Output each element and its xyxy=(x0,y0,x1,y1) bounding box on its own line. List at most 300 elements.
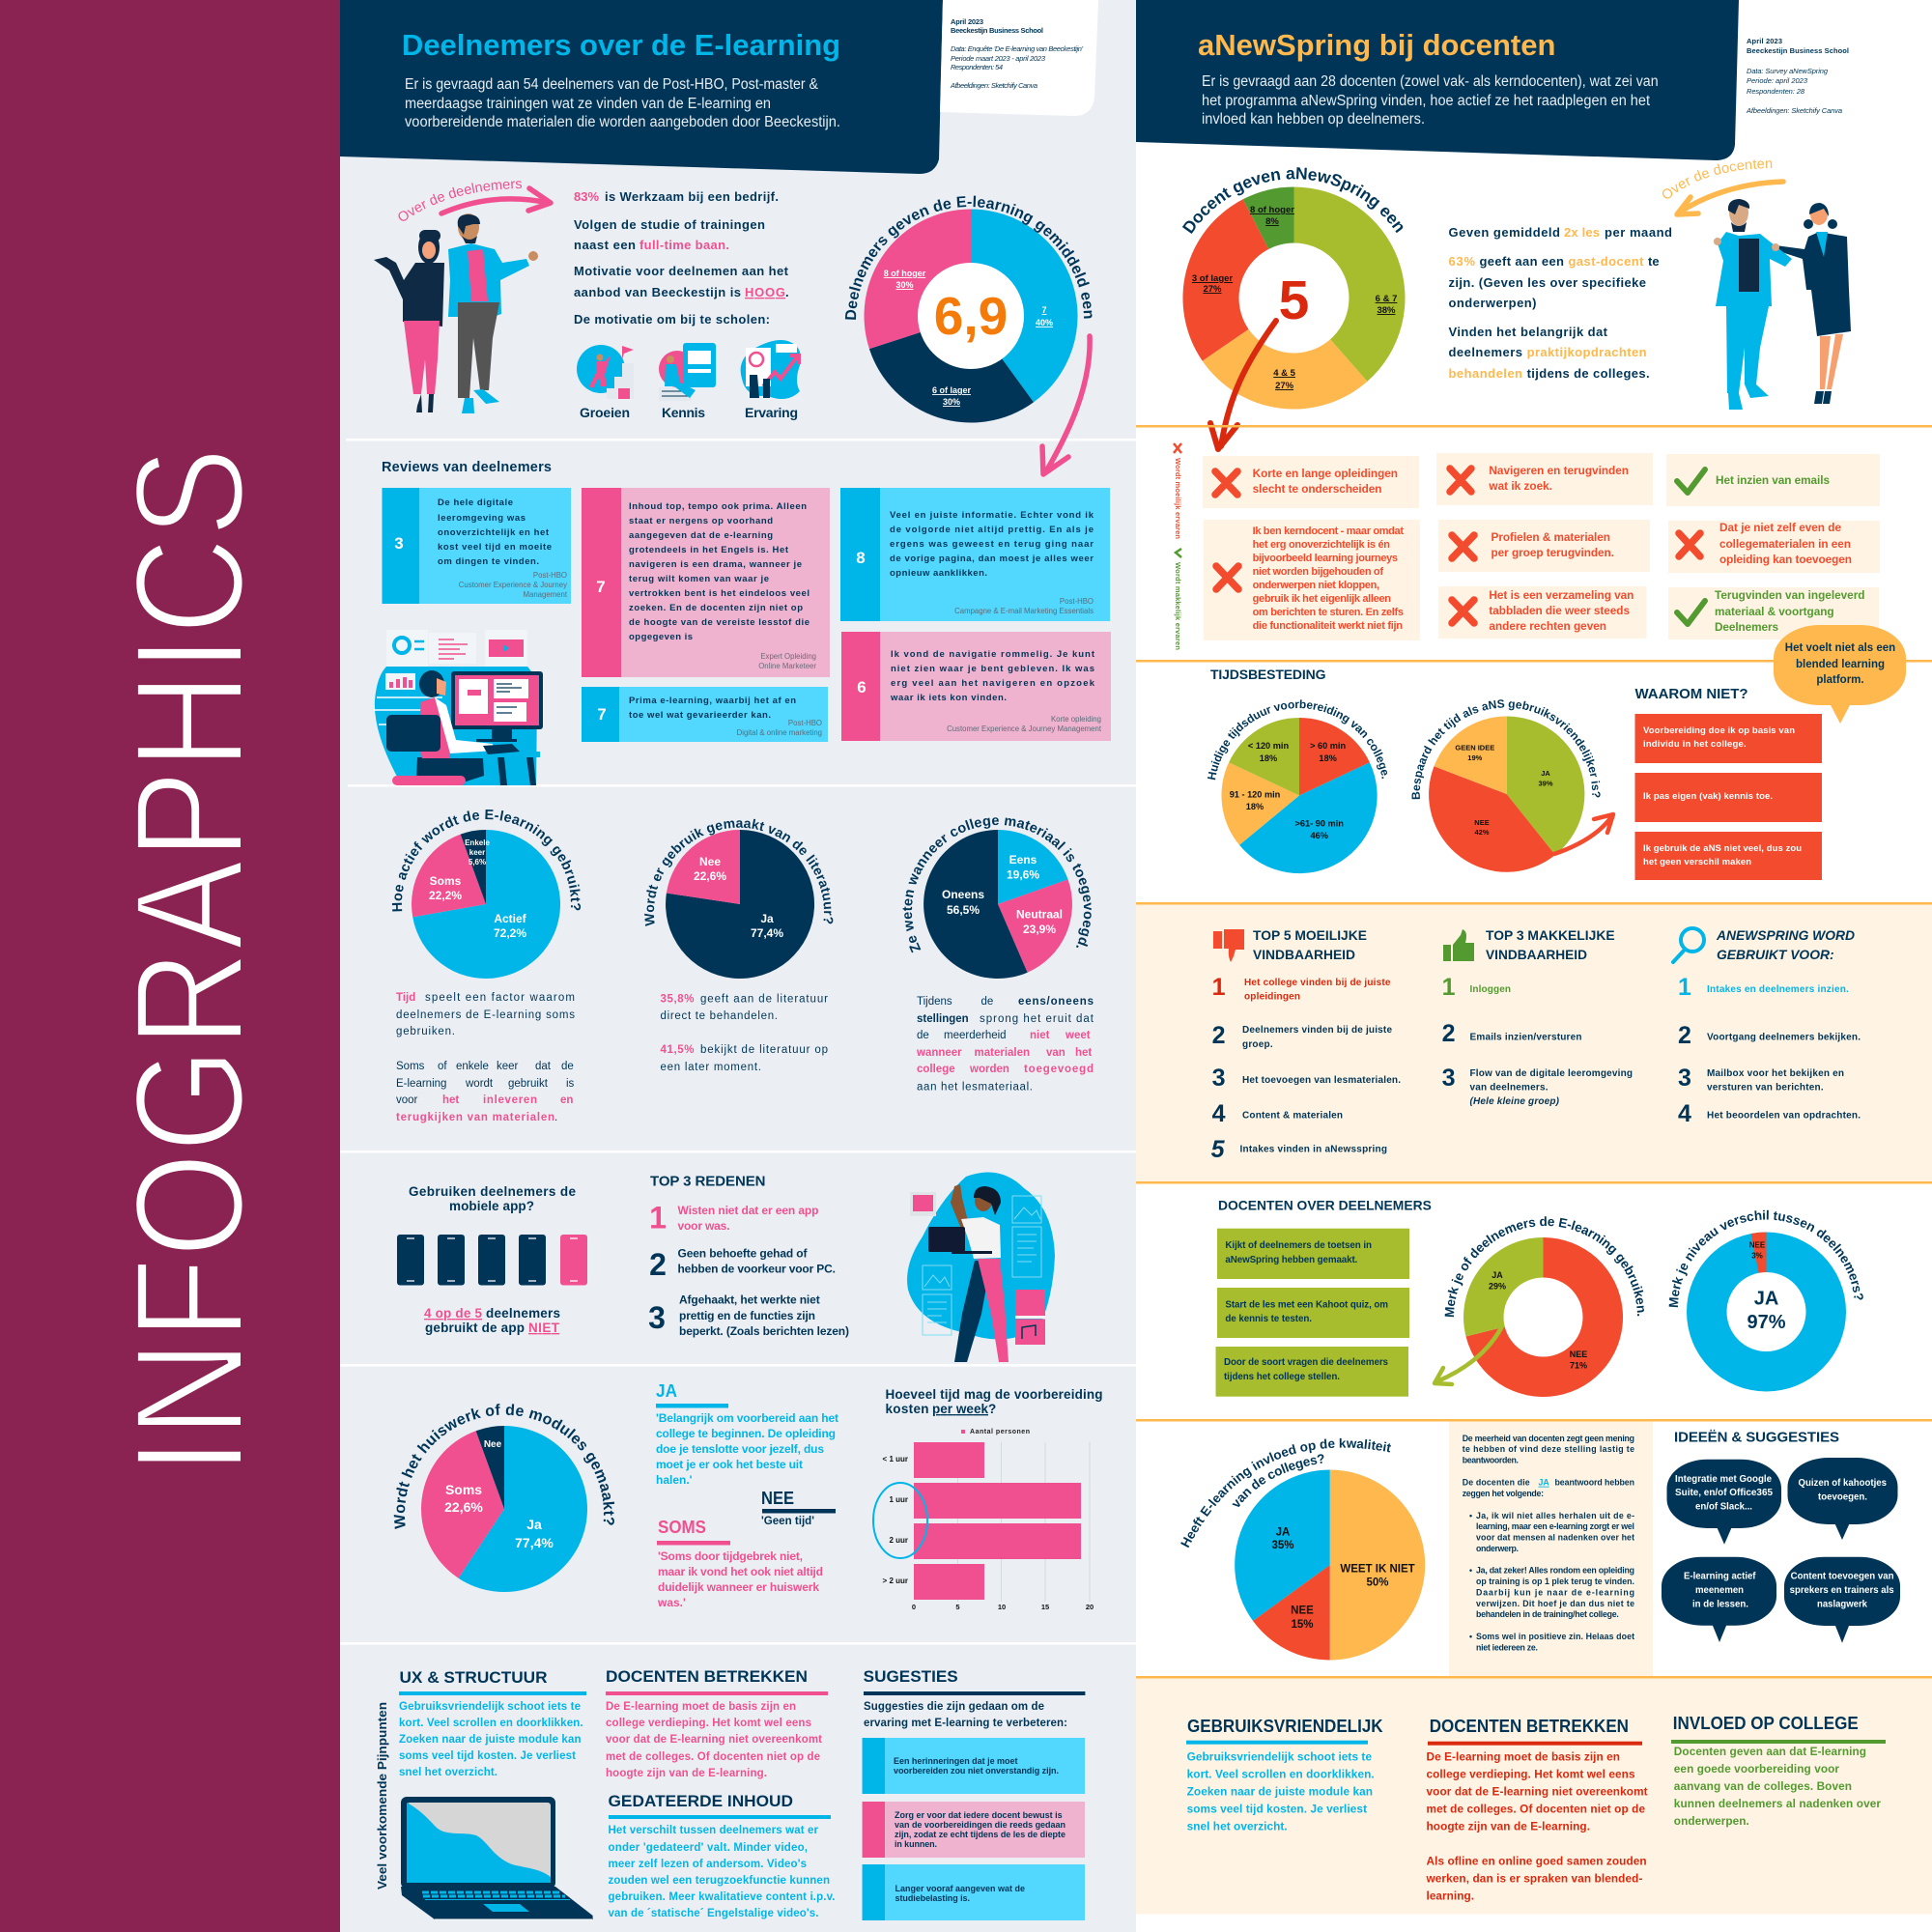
review card 7 short: Post-HBO xyxy=(788,719,822,727)
chart: pie materials: Neutraal xyxy=(1016,908,1063,922)
column: docenten betrekken: De E-learning moet de basis zijn en xyxy=(1426,1750,1620,1764)
difficult items: Navigeren en terugvinden xyxy=(1489,464,1629,477)
intro text: meerdaagse trainingen wat ze vinden van de E-learning en xyxy=(405,96,771,112)
difficult items: Ik ben kerndocent - maar omdat xyxy=(1253,526,1404,537)
list: top 3 easy: 1 xyxy=(1442,974,1456,1001)
review card 6: niet zien waar je bent gebleven. Ik was xyxy=(891,664,1094,674)
chart: pie influence xyxy=(1180,1437,1426,1660)
chart: pie materials xyxy=(902,817,1092,979)
column: suggesties: Suggesties die zijn gedaan om de xyxy=(864,1701,1044,1713)
text block: pie literature notes: direct te behandelen. xyxy=(661,1010,778,1022)
panel: top 3 reasons: hebben de voorkeur voor PC. xyxy=(678,1263,836,1276)
column: gebruiksvriendelijk: soms veel tijd kosten. Je verliest xyxy=(1187,1803,1367,1816)
chart: donut average score: 30% xyxy=(895,280,914,290)
text block: soms: maar ik vond het ook niet altijd xyxy=(658,1565,823,1578)
illustration: two lecturers xyxy=(1714,199,1851,410)
text block: influence explanation: verwijzen. Dit hoef je dan dus niet te xyxy=(1476,1599,1634,1608)
chart: pie activity: Actief xyxy=(494,912,527,925)
chart: pie current time: < 120 min xyxy=(1248,741,1289,751)
panel: lecturers about participants: aNewSpring hebben gemaakt. xyxy=(1225,1255,1358,1265)
text block: lecturers summary: Geven gemiddeld xyxy=(1449,225,1560,240)
text block: pie literature notes: 41,5% xyxy=(661,1044,694,1056)
icons: phones xyxy=(397,1235,587,1285)
icons: crosses xyxy=(1215,469,1700,623)
panel: left background xyxy=(340,0,1136,1932)
review card 6: Ik vond de navigatie rommelig. Je kunt xyxy=(891,649,1095,660)
heading: top 5: VINDBAARHEID xyxy=(1253,947,1355,962)
illustration: laptop xyxy=(401,1797,593,1919)
suggestion box 2: Zorg er voor dat iedere docent bewust is xyxy=(895,1810,1063,1820)
review card 7 long: aangegeven dat de e-learning xyxy=(629,530,773,541)
column: gedateerde inhoud: GEDATEERDE INHOUD xyxy=(609,1792,793,1810)
chart: donut average score: 7 xyxy=(1041,305,1047,315)
review card 6: Korte opleiding xyxy=(1051,715,1101,724)
difficult items: slecht te onderscheiden xyxy=(1253,482,1381,496)
text block: about participants: naast een xyxy=(574,238,636,252)
column: invloed op college: Docenten geven aan dat E-learning xyxy=(1674,1745,1866,1758)
curved title: Merk je niveau verschil tussen deelnemers? xyxy=(1669,1209,1863,1308)
review card 6: erg veel aan het navigeren en opzoek xyxy=(891,678,1095,689)
chart: pie influence: 15% xyxy=(1291,1619,1314,1631)
panel: source card left: Beeckestijn Business School xyxy=(951,26,1043,35)
panel: lecturers about participants: de kennis te testen. xyxy=(1225,1314,1312,1324)
review card 7 long xyxy=(582,488,830,677)
bubble: integratie: Suite, en/of Office365 xyxy=(1675,1487,1773,1498)
easy items: Het inzien van emails xyxy=(1716,473,1830,487)
list: top 3 easy: Inloggen xyxy=(1470,984,1511,995)
review card 3: De hele digitale xyxy=(438,497,513,508)
panel: source card left: Afbeeldingen: Sketchify Canva xyxy=(950,81,1037,90)
column: docenten betrekken: met de colleges. Of docenten niet op de xyxy=(606,1751,820,1763)
difficult items: collegematerialen in een xyxy=(1719,537,1851,551)
list: top 5 hard: Het toevoegen van lesmaterialen. xyxy=(1242,1075,1401,1086)
chart: donut level difference: 3% xyxy=(1751,1252,1763,1261)
review card 7 short: toe wel wat gevarieerder kan. xyxy=(629,710,771,721)
text block: nee: 'Geen tijd' xyxy=(761,1514,814,1527)
curved title: Wordt het huiswerk of de modules gemaakt? xyxy=(394,1404,614,1529)
text block: lecturers summary: geeft aan een xyxy=(1480,254,1564,269)
text block: pie materials notes: eens/oneens xyxy=(1018,996,1094,1008)
intro text: Er is gevraagd aan 28 docenten (zowel vak- als kerndocenten), wat zei van xyxy=(1202,73,1659,90)
column: gedateerde inhoud: van de ´statische´ Engelstalige video's. xyxy=(609,1908,819,1919)
column: docenten betrekken: De E-learning moet de basis zijn en xyxy=(606,1701,796,1713)
review card 7 long: terug wilt komen van waar je xyxy=(629,574,769,584)
text block: ja: moet je er ook het beste uit xyxy=(656,1458,803,1471)
column: ux en structuur xyxy=(399,1668,586,1778)
review card 3: Customer Experience & Journey xyxy=(459,581,567,589)
text block: influence explanation: beantwoorden. xyxy=(1463,1456,1519,1465)
column: gedateerde inhoud: onder 'gedateerd' valt. Minder video, xyxy=(609,1842,808,1854)
text block: lecturers summary: deelnemers xyxy=(1449,345,1522,359)
text block: about participants: De motivatie om bij te scholen: xyxy=(574,312,770,327)
text block: lecturers summary: gast-docent xyxy=(1569,254,1644,269)
list: top 3 easy: Emails inzien/versturen xyxy=(1470,1033,1582,1043)
list: top 5 hard: 5 xyxy=(1211,1136,1226,1163)
text block: pie materials notes: college xyxy=(917,1064,955,1075)
chart: donut notice usage: 29% xyxy=(1489,1282,1506,1292)
panel: mobile app xyxy=(397,1184,587,1335)
chart: donut lecturers score: 38% xyxy=(1377,305,1396,316)
intro text: invloed kan hebben op deelnemers. xyxy=(1202,111,1425,128)
bubble: quizen: toevoegen. xyxy=(1818,1492,1867,1503)
text block: pie materials notes: niet xyxy=(1030,1030,1050,1041)
difficult items: niet worden bijgehouden of xyxy=(1253,566,1383,578)
heading: INFOGRAPHICS: INFOGRAPHICS xyxy=(102,447,275,1475)
text block: pie literature notes: een later moment. xyxy=(661,1062,761,1073)
chart: donut notice usage: JA xyxy=(1492,1270,1503,1280)
illustration: two participants xyxy=(374,213,538,413)
icon: groeien xyxy=(577,345,634,420)
chart: pie saves time: NEE xyxy=(1474,818,1490,827)
label: Kennis: Kennis xyxy=(662,405,705,420)
panel: reviews xyxy=(382,460,1111,742)
column: docenten betrekken: hoogte zijn van de E-learning. xyxy=(1426,1820,1590,1833)
text block: pie activity notes: . xyxy=(554,1112,557,1123)
text block: lecturers summary: te xyxy=(1648,254,1660,269)
text block: pie literature notes: bekijkt de literatuur op xyxy=(700,1044,828,1056)
text block: pie activity notes: is xyxy=(566,1078,575,1090)
chart: pie influence: 35% xyxy=(1271,1540,1294,1551)
text block: lecturers summary: 63% xyxy=(1449,254,1475,269)
chart: pie literature: Nee xyxy=(699,855,721,868)
panel: mobile app: deelnemers xyxy=(486,1306,560,1321)
review card 3: kost veel tijd en moeite xyxy=(438,542,552,553)
panel: top lists xyxy=(1211,927,1861,1163)
text block: pie literature notes xyxy=(661,993,828,1073)
text block: pie materials notes: het xyxy=(1075,1047,1092,1059)
intro text: het programma aNewSpring vinden, hoe actief ze het raadplegen en het xyxy=(1202,93,1651,109)
column: docenten betrekken: werken, dan is er spraken van blended- xyxy=(1426,1872,1642,1886)
text block: about participants: is Werkzaam bij een bedrijf. xyxy=(601,189,779,204)
legend: rotated: Wordt moeilijk ervaren xyxy=(1174,458,1182,539)
suggestion box 3 xyxy=(863,1864,1085,1920)
curved title: Huidige tijdsduur voorbereiding van college. xyxy=(1208,699,1387,781)
heading: top 5 xyxy=(1253,927,1367,962)
legend: rotated xyxy=(1174,443,1182,650)
text block: influence explanation: te hebben of vind deze stelling lastig te xyxy=(1463,1444,1634,1454)
text block: influence explanation: niet iedereen ze. xyxy=(1476,1643,1538,1653)
panel: why not: het geen verschil maken xyxy=(1643,857,1751,867)
column: docenten betrekken xyxy=(1426,1717,1648,1903)
dividers left xyxy=(340,439,1136,1644)
text block: pie activity notes: wordt xyxy=(465,1078,494,1090)
review card 7 long: staat er nergens op voorhand xyxy=(629,516,773,526)
text block: pie activity notes: dat xyxy=(535,1061,552,1072)
callout: over de docenten: Over de docenten xyxy=(1662,159,1772,199)
intro text: voorbereidende materialen die worden aangeboden door Beeckestijn. xyxy=(405,114,840,130)
panel: left header xyxy=(340,0,943,174)
column: docenten betrekken: learning. xyxy=(1426,1889,1474,1903)
review card 7 long: Expert Opleiding xyxy=(760,652,816,661)
difficult items: wat ik zoek. xyxy=(1488,479,1552,493)
text block: pie activity notes: gebruiken. xyxy=(396,1026,455,1037)
chart: donut lecturers score xyxy=(1182,167,1405,410)
chart: donut lecturers score: 6 & 7 xyxy=(1376,294,1397,304)
list: top 5 hard: 2 xyxy=(1212,1022,1226,1049)
text block: influence explanation: • xyxy=(1469,1511,1472,1520)
list: top 5 hard xyxy=(1211,974,1401,1163)
difficult items: per groep terugvinden. xyxy=(1492,546,1614,559)
arrow: red to list xyxy=(1210,321,1276,449)
text block: pie materials notes: meerderheid xyxy=(944,1030,1007,1041)
text block: influence explanation: De meerheid van docenten zegt geen mening xyxy=(1463,1434,1634,1443)
list: top 3 easy: (Hele kleine groep) xyxy=(1470,1096,1560,1107)
panel: pain points xyxy=(375,1667,1085,1920)
text block: influence explanation: Ja, dat zeker! Alles rondom een opleiding xyxy=(1476,1566,1634,1576)
text block: pie materials notes: weet xyxy=(1065,1030,1091,1041)
column: docenten betrekken xyxy=(606,1667,828,1779)
review card 7 short: Prima e-learning, waarbij het af en xyxy=(629,696,796,706)
orange dividers and cream blocks xyxy=(1136,425,1932,1915)
text block: pie materials notes: sprong het eruit dat xyxy=(980,1013,1094,1025)
text block: pie activity notes: deelnemers de E-learning soms xyxy=(396,1009,575,1021)
chart: pie saves time: JA xyxy=(1541,769,1550,778)
text block: pie activity notes: voor xyxy=(396,1094,418,1106)
chart: pie saves time: 42% xyxy=(1474,828,1490,837)
text block: soms: SOMS xyxy=(658,1518,706,1537)
panel: experiences xyxy=(1203,453,1880,640)
review card 8: de volgorde niet altijd prettig. En als je xyxy=(890,525,1094,535)
list: top 5 hard: 4 xyxy=(1212,1100,1226,1127)
review card 7 long: Online Marketeer xyxy=(758,662,816,670)
text block: influence explanation: learning, maar een e-learning zorgt er wel xyxy=(1476,1521,1634,1531)
text block: ja: JA xyxy=(656,1381,677,1401)
column: suggesties xyxy=(863,1667,1085,1920)
curved title: Docent geven aNewSpring een xyxy=(1182,167,1403,234)
panel: lecturers about participants: Door de soort vragen die deelnemers xyxy=(1224,1357,1389,1368)
chart: pie homework: 77,4% xyxy=(515,1535,554,1550)
bubble: content: sprekers en trainers als xyxy=(1790,1584,1894,1596)
easy items: Deelnemers xyxy=(1715,620,1778,634)
text block: pie materials notes: de xyxy=(981,996,993,1008)
suggestion box 3: studiebelasting is. xyxy=(895,1893,970,1903)
bubble: integratie: en/of Slack... xyxy=(1695,1501,1752,1513)
chart: pie materials: 56,5% xyxy=(947,903,980,917)
review card 6: 6 xyxy=(857,678,867,696)
review card 7 long: zoeken. En de docenten zijn niet op xyxy=(629,603,803,613)
panel: why not xyxy=(1634,686,1822,880)
text block: pie materials notes: stellingen xyxy=(917,1013,969,1025)
chart: donut level difference: NEE xyxy=(1749,1241,1766,1250)
chart: donut average score: 30% xyxy=(943,397,960,407)
icon: ervaring xyxy=(741,340,801,420)
list: top 3 easy: 3 xyxy=(1442,1065,1456,1092)
chart: pie homework: Ja xyxy=(526,1517,542,1532)
heading: anewspring: GEBRUIKT VOOR: xyxy=(1717,947,1834,962)
chart: donut average score: 40% xyxy=(1036,318,1053,327)
text block: nee: NEE xyxy=(761,1489,794,1508)
chart: donut lecturers score: 4 & 5 xyxy=(1273,368,1296,379)
title: Deelnemers over de E-learning xyxy=(402,28,840,62)
text block: pie activity notes: de xyxy=(561,1061,574,1072)
list: usage: 2 xyxy=(1678,1022,1691,1049)
curved title: Bespaard het tijd als aNS gebruiksvriendelijker is? xyxy=(1412,699,1601,800)
review card 7 long: de hoogte van de vereiste lesstof die xyxy=(629,617,810,628)
chart: pie homework xyxy=(394,1404,614,1592)
bubble: actief: in de lessen. xyxy=(1692,1599,1748,1610)
intro text: Er is gevraagd aan 54 deelnemers van de Post-HBO, Post-master & xyxy=(405,76,819,93)
chart: bar preparation time: per week xyxy=(932,1402,988,1416)
list: usage: Voortgang deelnemers bekijken. xyxy=(1707,1033,1861,1043)
review card 6 xyxy=(841,632,1111,741)
chart: pie literature: 77,4% xyxy=(751,926,783,940)
text block: lecturers summary: 2x les xyxy=(1564,225,1600,240)
illustration: woman with laptop xyxy=(907,1173,1055,1362)
text block: pie activity notes: Soms xyxy=(396,1061,425,1072)
heading: top 3 xyxy=(1486,927,1615,962)
text block: source right: Beeckestijn Business School xyxy=(1747,46,1849,55)
list: usage: 3 xyxy=(1678,1065,1691,1092)
text block: influence explanation: De docenten die xyxy=(1463,1478,1530,1488)
column: gebruiksvriendelijk: snel het overzicht. xyxy=(1187,1820,1288,1833)
chart: donut notice usage: 71% xyxy=(1570,1361,1587,1371)
suggestion box 1: Een herinneringen dat je moet xyxy=(894,1756,1018,1766)
review card 7 long: grotendeels in het Engels is. Het xyxy=(629,545,789,555)
suggestion box 1 xyxy=(863,1738,1085,1794)
review card 7 long: 7 xyxy=(596,578,606,596)
difficult items: Korte en lange opleidingen xyxy=(1253,467,1398,480)
text block: pie materials notes: de xyxy=(917,1030,929,1041)
chart: pie literature: 22,6% xyxy=(694,869,726,883)
panel: source card left: Periode maart 2023 - april 2023 xyxy=(951,54,1046,63)
text block: about participants: Motivatie voor deelnemen aan het xyxy=(574,264,789,278)
review card 8: opnieuw aanklikken. xyxy=(890,568,987,579)
panel: top 3 reasons: 2 xyxy=(649,1247,667,1282)
bubble: quizen xyxy=(1787,1458,1897,1540)
bubble: integratie xyxy=(1667,1460,1781,1545)
bubble: actief: E-learning actief xyxy=(1684,1571,1756,1582)
review card 3: leeromgeving was xyxy=(438,513,526,524)
list: top 5 hard: 1 xyxy=(1212,974,1226,1001)
text block: influence explanation: • xyxy=(1469,1566,1472,1576)
chart: pie saves time: GEEN IDEE xyxy=(1455,744,1494,753)
panel: top 3 reasons: Afgehaakt, het werkte niet xyxy=(679,1293,820,1307)
column: gedateerde inhoud xyxy=(609,1792,835,1919)
panel: ideas: IDEEËN & SUGGESTIES xyxy=(1674,1430,1839,1446)
chart: pie homework: Nee xyxy=(484,1439,502,1450)
text block: soms: 'Soms door tijdgebrek niet, xyxy=(658,1549,803,1563)
list: top 3 easy: Flow van de digitale leeromgeving xyxy=(1470,1068,1633,1079)
bubble: quizen: Quizen of kahootjes xyxy=(1799,1477,1887,1489)
text block: lecturers summary: zijn. (Geven les over specifieke xyxy=(1449,275,1646,290)
text block: about participants: Volgen de studie of trainingen xyxy=(574,217,765,232)
difficult items: die functionaliteit werkt niet fijn xyxy=(1253,620,1403,632)
list: top 3 easy: van deelnemers. xyxy=(1470,1083,1548,1094)
chart: pie saves time xyxy=(1412,699,1601,872)
text block: pie materials notes: Tijdens xyxy=(917,996,952,1008)
panel: top 3 reasons: beperkt. (Zoals berichten lezen) xyxy=(679,1324,849,1338)
text block: pie activity notes: Tijd xyxy=(396,992,415,1004)
text block: lecturers summary xyxy=(1449,225,1672,381)
column: invloed op college: onderwerpen. xyxy=(1674,1814,1749,1828)
review card 7 long: navigeren is een drama, wanneer je xyxy=(629,559,802,570)
panel: top 3 reasons: 1 xyxy=(649,1200,667,1235)
panel: top 3 reasons: Wisten niet dat er een app xyxy=(678,1204,819,1217)
chart: pie current time: >61- 90 min xyxy=(1295,819,1344,829)
review card 3: onoverzichtelijk en het xyxy=(438,527,550,538)
panel: lecturers about participants xyxy=(1215,1198,1432,1397)
panel: source card left: Respondenten: 54 xyxy=(951,63,1003,71)
chart: bar preparation time: 20 xyxy=(1086,1603,1094,1611)
review card 6: Customer Experience & Journey Management xyxy=(947,724,1102,733)
heading: top 5: TOP 5 MOEILIJKE xyxy=(1253,927,1367,943)
number: 6,9: 6,9 xyxy=(934,286,1008,346)
list: top 5 hard: Intakes vinden in aNewsspring xyxy=(1240,1145,1387,1155)
panel: why not: WAAROM NIET? xyxy=(1634,686,1748,702)
panel: mobile app: NIET xyxy=(528,1321,560,1335)
text block: pie activity notes: E-learning xyxy=(396,1078,446,1090)
suggestion box 3: Langer vooraf aangeven wat de xyxy=(895,1884,1025,1893)
column: suggesties: SUGESTIES xyxy=(864,1667,958,1686)
panel: top 3 reasons xyxy=(648,1173,849,1338)
chart: donut average score xyxy=(844,195,1092,423)
text block: influence explanation: Ja, ik wil niet alles herhalen uit de e- xyxy=(1476,1511,1634,1520)
chart: donut lecturers score: 3 of lager xyxy=(1192,273,1233,284)
chart: bar preparation time: ? xyxy=(988,1402,996,1416)
column: gedateerde inhoud: gebruiken. Meer kwalitatieve content i.p.v. xyxy=(609,1891,835,1903)
chart: donut level difference xyxy=(1669,1209,1863,1391)
review card 8: ergens was geweest en terug ging naar xyxy=(890,539,1094,550)
suggestion box 2: van de voorbereidingen die reeds gedaan xyxy=(895,1820,1065,1830)
column: ux en structuur: kort. Veel scrollen en doorklikken. xyxy=(399,1718,583,1729)
panel: maroon side band xyxy=(0,0,340,1932)
column: ux en structuur: UX & STRUCTUUR xyxy=(400,1668,547,1687)
text block: lecturers summary: behandelen xyxy=(1449,366,1522,381)
review card 3: Post-HBO xyxy=(533,571,567,580)
panel: top 3 reasons: voor was. xyxy=(678,1219,730,1233)
text block: source right: April 2023 xyxy=(1747,37,1782,45)
chart: bar preparation time xyxy=(873,1387,1103,1611)
chart: donut level difference: 97% xyxy=(1747,1312,1786,1333)
suggestion box 1: voorbereiden zou niet onverstandig zijn. xyxy=(894,1766,1059,1776)
heading: top 3: VINDBAARHEID xyxy=(1486,947,1587,962)
difficult items: Het is een verzameling van xyxy=(1489,588,1634,602)
column: docenten betrekken: hoogte zijn van de E-learning. xyxy=(606,1768,767,1779)
curved chart title: Deelnemers geven de E-learning gemiddeld een xyxy=(844,195,1092,320)
chart: bar preparation time: 15 xyxy=(1041,1603,1049,1611)
text block: influence explanation: behandelen in de training/het college. xyxy=(1476,1609,1619,1619)
text block: soms: duidelijk wanneer er huiswerk xyxy=(658,1580,819,1594)
text block: influence explanation: • xyxy=(1469,1632,1472,1641)
intro text xyxy=(1202,73,1659,128)
chart: pie activity: 72,2% xyxy=(494,926,526,940)
callout: over de deelnemers: Over de deelnemers xyxy=(398,181,522,221)
chart: pie materials: Oneens xyxy=(942,888,984,901)
heading: tijdsbesteding: TIJDSBESTEDING xyxy=(1210,667,1326,682)
list: usage: versturen van berichten. xyxy=(1707,1083,1824,1094)
list: top 3 easy: 2 xyxy=(1442,1020,1456,1047)
callout: orange bubble: platform. xyxy=(1816,674,1864,686)
column: docenten betrekken: DOCENTEN BETREKKEN xyxy=(606,1667,808,1686)
difficult items: opleiding kan toevoegen xyxy=(1719,553,1852,566)
text block: source right: Data: Survey aNewSpring xyxy=(1747,67,1829,75)
text block: about participants: 83% xyxy=(574,189,599,204)
easy items xyxy=(1715,473,1864,634)
text block: ja: college te beginnen. De opleiding xyxy=(656,1427,836,1440)
chart: pie current time: 46% xyxy=(1311,831,1328,840)
curved title: van de colleges? xyxy=(1233,1454,1323,1507)
bubble: content xyxy=(1784,1557,1900,1643)
heading: top 3: TOP 3 MAKKELIJKE xyxy=(1486,927,1615,943)
chart: pie influence: NEE xyxy=(1291,1605,1314,1617)
text block: influence explanation: JA xyxy=(1538,1478,1549,1488)
chart: pie current time: > 60 min xyxy=(1310,741,1346,751)
callout: over de docenten xyxy=(1662,159,1786,217)
text block: influence explanation: onderwerp. xyxy=(1476,1544,1519,1553)
panel: mobile app: mobiele app? xyxy=(449,1199,534,1213)
column: ux en structuur: soms veel tijd kosten. Je verliest xyxy=(399,1750,576,1762)
curved title: Wordt er gebruik gemaakt van de literatuur? xyxy=(644,819,833,926)
